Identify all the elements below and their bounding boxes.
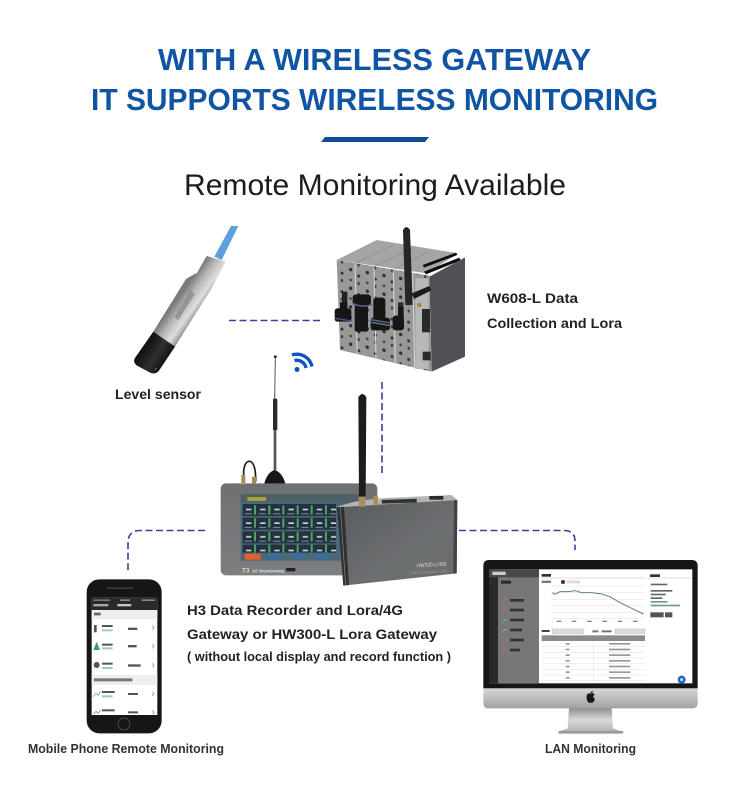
magnetic antenna — [264, 355, 286, 485]
icon: HW300-L gateway — [337, 394, 457, 586]
detail panel — [650, 574, 660, 577]
label: W608-L data collection: W608-L Data — [487, 290, 578, 306]
icon: HW300-L gateway: HW300-L/485 — [416, 562, 447, 569]
front face — [337, 260, 432, 372]
icon: mobile phone — [87, 579, 162, 733]
label: LAN monitoring: LAN Monitoring — [545, 741, 636, 756]
apple logo — [587, 691, 595, 703]
help button — [678, 676, 686, 684]
filter bar — [542, 630, 550, 632]
label: H3 data recorder: ( without local display and record function ) — [187, 650, 451, 664]
title — [91, 43, 658, 117]
dashboard panel — [542, 574, 551, 577]
touchscreen — [241, 494, 361, 561]
top face — [337, 495, 457, 508]
title: WITH A WIRELESS GATEWAY — [158, 43, 591, 77]
title: IT SUPPORTS WIRELESS MONITORING — [91, 83, 658, 117]
label: H3 data recorder: H3 Data Recorder and Lora/4G — [187, 602, 403, 618]
subtitle: Remote Monitoring Available — [184, 169, 566, 202]
side face — [429, 257, 465, 372]
arrow: data collector to gateway — [381, 382, 383, 473]
label: mobile phone monitoring: Mobile Phone Remote Monitoring — [28, 741, 224, 756]
arrow: gateway to phone — [128, 530, 205, 570]
icon: HW300-L gateway: Data Acquisition Unit — [410, 568, 447, 575]
icon: desktop monitor with dashboard — [483, 560, 698, 734]
gateway body — [221, 483, 377, 575]
line chart — [551, 586, 643, 622]
plug connectors — [335, 294, 404, 332]
data table — [542, 635, 645, 681]
icon: wifi signal — [292, 354, 312, 372]
top face — [337, 240, 458, 273]
screen — [489, 569, 692, 683]
icon: T3 gateway with magnetic antenna — [221, 355, 377, 575]
antenna — [358, 394, 366, 497]
label: W608-L data collection: Collection and Lora — [487, 315, 622, 331]
antenna — [403, 227, 413, 305]
terminal strip and port — [422, 309, 430, 332]
phone screen — [92, 598, 157, 715]
antenna cable — [244, 461, 256, 482]
brand strip: T3 — [242, 568, 250, 575]
label: H3 data recorder — [187, 602, 451, 664]
arrow: sensor to data collector — [229, 320, 320, 322]
arrow: gateway to LAN — [459, 530, 575, 550]
title underline accent — [321, 137, 429, 142]
label: W608-L data collection — [487, 290, 622, 331]
label: H3 data recorder: Gateway or HW300-L Lora Gateway — [187, 626, 437, 642]
icon: W608-L data collection module — [335, 227, 465, 372]
stand — [558, 708, 623, 732]
icon: level sensor — [134, 226, 238, 373]
label: level sensor: Level sensor — [115, 386, 202, 402]
front face — [337, 500, 457, 586]
monitor frame — [483, 560, 698, 688]
icon: T3 gateway with magnetic antenna: IoT SmartGateway — [253, 568, 285, 573]
